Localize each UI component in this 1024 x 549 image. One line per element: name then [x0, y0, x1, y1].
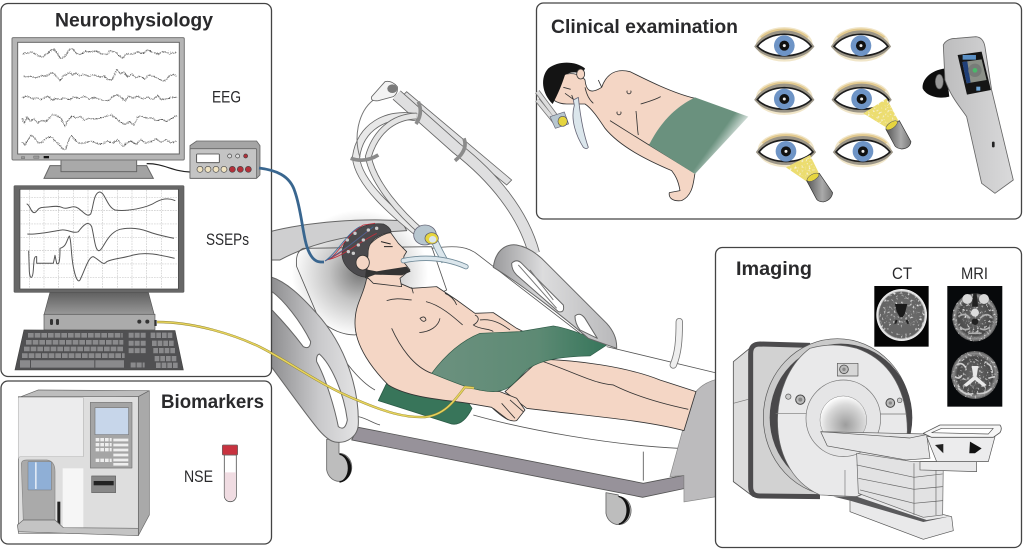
heading: Imaging: Imaging: [736, 259, 812, 280]
CT scan image: [874, 286, 929, 347]
panel frame: [716, 248, 1022, 548]
green drape: [432, 326, 608, 392]
connector: [550, 112, 569, 128]
bed frame: [352, 427, 684, 497]
pupillometer: [923, 37, 1013, 193]
label: NSE: NSE: [184, 467, 213, 486]
front wheel: [327, 439, 352, 482]
blue EEG cable: [259, 168, 324, 262]
screen grid: [21, 190, 178, 288]
green pad under arm: [378, 383, 472, 424]
SSEP computer: [14, 186, 184, 370]
monitor body: [14, 186, 184, 292]
scanner dark ring: [770, 344, 912, 492]
upper MRI slice: [952, 293, 998, 341]
SSEP waveforms: [27, 192, 175, 281]
rear wheel: [606, 493, 631, 525]
pupil exam eyes: [756, 27, 911, 202]
scanner controls: [837, 363, 858, 376]
heading: Biomarkers: Biomarkers: [161, 392, 264, 413]
panel: neurophysiology: [1, 4, 272, 376]
keyboard: [15, 330, 183, 370]
pillow: [296, 247, 447, 335]
tube clips: [351, 102, 465, 161]
mattress outline: [327, 247, 715, 481]
eyecup: [923, 68, 949, 98]
head shadow on pillow: [292, 210, 428, 337]
ear: [356, 255, 369, 270]
keypad panel: [90, 402, 132, 468]
foot tube: [673, 322, 679, 365]
label: MRI: MRI: [961, 264, 988, 283]
eye 3: [756, 80, 813, 115]
bed side rails: [270, 245, 617, 442]
MRI scanner: [733, 339, 1001, 539]
panel: biomarkers: [1, 381, 272, 544]
tube and connector: [537, 92, 558, 122]
scanner face: [778, 345, 907, 497]
monitor screen: [20, 189, 178, 289]
monitor stand: [44, 166, 153, 178]
device body: [943, 37, 1013, 193]
panel: imaging: [716, 248, 1022, 548]
eye 6: [835, 133, 891, 167]
device screen: [958, 52, 991, 95]
table bed: [821, 432, 930, 460]
eye 1: [756, 27, 813, 62]
monitor buttons: [21, 156, 39, 159]
torch beam left: [786, 155, 819, 183]
scanner bore: [806, 380, 881, 457]
breathing tubes: [356, 116, 421, 235]
left slot fill: [325, 363, 343, 420]
panel frame: [1, 381, 272, 544]
EEG traces: [21, 48, 176, 149]
monitor neck: [44, 292, 154, 315]
ET tube: [573, 97, 588, 149]
NSE blood tube: [222, 445, 238, 502]
eye 4: [833, 80, 890, 115]
right side rail: [493, 245, 617, 348]
torch beam right: [863, 98, 898, 129]
dark frame: [751, 344, 820, 497]
torch left: [807, 173, 833, 202]
panel: clinical examination: [536, 3, 1022, 219]
label: EEG: EEG: [212, 88, 241, 106]
headboard: [270, 220, 407, 260]
chest lines: [563, 80, 661, 145]
heading: Neurophysiology: Neurophysiology: [55, 10, 213, 32]
electrodes and wires: [325, 223, 377, 261]
body: [553, 71, 695, 201]
eye 2: [833, 27, 889, 62]
monitor screen: [18, 42, 179, 154]
label: SSEPs: SSEPs: [206, 230, 249, 249]
drape: [649, 97, 748, 174]
yellow SSEP cable: [157, 322, 474, 417]
lower MRI slice: [951, 351, 999, 399]
heading: Clinical examination: Clinical examination: [551, 17, 738, 38]
mask connector: [435, 242, 445, 262]
MRI scan images: [947, 286, 1002, 407]
patient lying on the bed: [325, 223, 696, 431]
blood analyzer machine: [17, 390, 149, 536]
table base: [850, 494, 953, 539]
left side rail: [270, 277, 358, 442]
foot board: [670, 379, 717, 502]
torso and arm: [355, 278, 527, 421]
support arm: [400, 92, 512, 185]
panel frame: [536, 3, 1022, 219]
eye 5: [758, 133, 814, 167]
hair: [543, 63, 585, 104]
black cable: [147, 164, 190, 172]
legs: [505, 359, 696, 431]
panel frame: [1, 4, 272, 376]
head coil: [923, 425, 1001, 437]
monitor bezel: [12, 38, 184, 160]
patient with tube: [537, 63, 748, 201]
EEG monitor: [12, 38, 184, 178]
ventilator arm and tubing: [351, 81, 534, 262]
EEG amplifier device: [147, 141, 260, 178]
endotracheal tube: [403, 258, 466, 267]
yellow cable core: [157, 322, 474, 417]
ear: [577, 69, 585, 79]
scanner ring: [763, 339, 911, 496]
torch right: [886, 121, 911, 149]
computer case: [44, 314, 155, 330]
chest and arm lines: [387, 287, 523, 420]
arm head connector: [371, 81, 397, 101]
scanner rear housing: [733, 344, 813, 498]
chin strap and beard: [365, 267, 411, 278]
hospital bed: [270, 210, 717, 525]
EEG cap: [342, 224, 391, 277]
neck and face: [367, 233, 410, 287]
label: CT: CT: [892, 264, 912, 283]
